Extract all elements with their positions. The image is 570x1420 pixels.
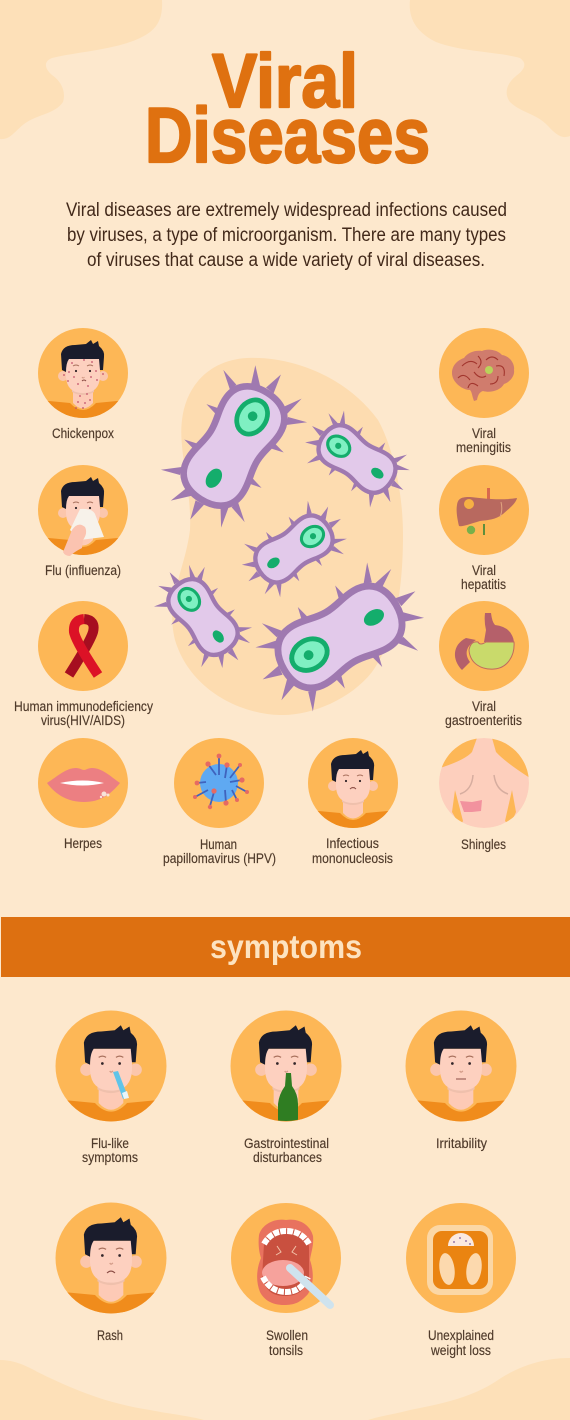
label [445,699,522,728]
label: meningitis [456,440,511,455]
virus 2 [293,401,421,517]
title [145,39,430,179]
disease: flu [38,465,128,578]
label [312,836,393,866]
intro paragraph: Viral diseases are extremely widespread infections caused [66,200,507,221]
virus 1 [147,347,321,545]
icon: face [406,1011,516,1128]
central virus illustration [143,347,442,725]
icon: face [56,1203,166,1320]
icon: face [308,738,398,833]
intro paragraph: of viruses that cause a wide variety of viral diseases. [87,250,485,271]
label: Chickenpox [52,426,114,441]
label [244,1136,329,1165]
icon: bathroom scale [406,1203,516,1313]
label: Rash [97,1328,123,1343]
label [428,1328,494,1358]
label: mononucleosis [312,851,393,866]
label: Herpes [64,836,102,851]
icon: virus particle [174,738,264,828]
icon: open mouth with stick [231,1203,341,1313]
label: Viral [472,426,496,441]
symptom: irritability [406,1011,516,1151]
label: gastroenteritis [445,713,522,728]
label: Human immunodeficiency [14,699,153,714]
label: Infectious [326,836,379,851]
label: Flu (influenza) [45,563,121,578]
label: Flu-like [91,1136,129,1151]
icon: face with tissue [38,465,128,560]
virus 4 [143,553,263,681]
disease: herpes [38,738,128,851]
icon: lips [38,738,128,828]
intro paragraph: by viruses, a type of microorganism. There are many types [67,225,506,246]
icon: liver [439,465,529,555]
label: symptoms [82,1150,138,1165]
title: Diseases [145,91,430,179]
virus 3 [230,491,358,607]
label: tonsils [269,1343,303,1358]
virus 5 [238,549,442,725]
label: Human [200,837,237,852]
disease: viral hepatitis [439,465,529,592]
icon: brain [439,328,529,418]
disease: viral meningitis [439,328,529,455]
disease: chickenpox [38,328,128,441]
disease: shingles [439,738,530,852]
symptoms banner [1,917,570,977]
label: Shingles [461,837,506,852]
label: hepatitis [461,577,506,592]
symptom: flu-like [56,1011,166,1165]
symptom: gastrointestinal [231,1011,341,1165]
icon: torso with rash [439,738,530,828]
disease: mononucleosis [308,738,398,866]
disease: viral gastroenteritis [439,601,529,728]
label [461,563,506,592]
label: Irritability [436,1136,487,1151]
label: disturbances [253,1150,322,1165]
label: Viral [472,563,496,578]
label [163,837,276,866]
label: Swollen [266,1328,308,1343]
banner heading: symptoms [210,928,362,965]
disease: HPV [163,738,276,866]
icon: face with bottle [231,1011,341,1128]
icon: face with thermometer [56,1011,166,1128]
icon: red ribbon [38,601,128,691]
title: Viral [212,39,358,124]
label: papillomavirus (HPV) [163,851,276,866]
disease: HIV/AIDS [14,601,153,728]
label: Unexplained [428,1328,494,1343]
backdrop blob [172,358,403,715]
label: virus(HIV/AIDS) [41,713,125,728]
label [456,426,511,455]
icon: stomach [439,601,529,691]
intro paragraph [66,200,507,271]
symptom: rash [56,1203,166,1343]
symptom: unexplained weight loss [406,1203,516,1358]
label [82,1136,138,1165]
icon: face with spots [38,328,128,423]
label: Gastrointestinal [244,1136,329,1151]
label: Viral [472,699,496,714]
label [14,699,153,728]
label [266,1328,308,1358]
label: weight loss [430,1343,491,1358]
symptom: swollen tonsils [231,1203,341,1358]
